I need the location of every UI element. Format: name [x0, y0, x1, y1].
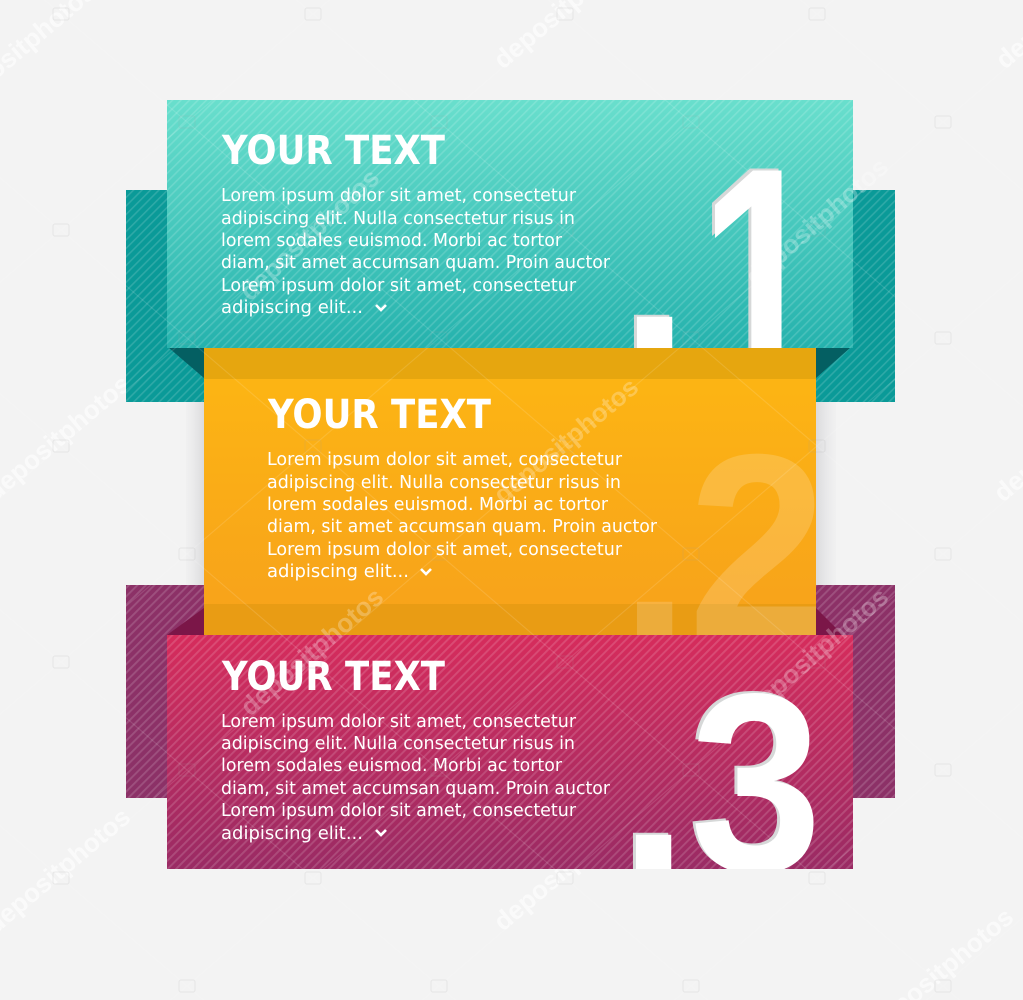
number 1 — [634, 168, 782, 348]
heading: card 2: YOUR TEXT — [267, 392, 492, 438]
body text: card 1: lorem sodales euismod. Morbi ac tortor — [221, 231, 563, 251]
body text: card 1: Lorem ipsum dolor sit amet, consectetur — [221, 186, 577, 206]
body text: card 3: Lorem ipsum dolor sit amet, consectetur — [221, 712, 577, 732]
watermarks: depositphotos — [488, 798, 644, 937]
watermarks over panels — [234, 151, 894, 722]
icon: chevron 3 — [376, 830, 386, 835]
fold: plum right — [816, 608, 843, 635]
watermarks over panels: depositphotos — [488, 371, 644, 510]
panel: plum back band — [126, 585, 895, 798]
panel: teal back band — [126, 190, 895, 402]
watermarks over panels: depositphotos — [234, 581, 389, 722]
number 2: 2 — [688, 401, 827, 692]
body text: card 2 — [267, 450, 658, 582]
body text: card 2: Lorem ipsum dolor sit amet, consectetur — [267, 540, 623, 560]
body text: card 3: diam, sit amet accumsan quam. Proin auctor — [221, 779, 611, 799]
number 1: 1 — [700, 104, 822, 448]
body text: card 3: adipiscing elit... — [221, 824, 363, 844]
number 2 — [637, 454, 816, 635]
body text: card 1 — [221, 186, 611, 318]
watermarks over panels: depositphotos — [739, 581, 894, 722]
body text: card 3: adipiscing elit. Nulla consectetur risus in — [221, 734, 575, 754]
fold: teal right — [816, 348, 850, 378]
fold: teal left — [169, 348, 204, 378]
body text: card 2: diam, sit amet accumsan quam. Proin auctor — [267, 517, 658, 537]
body text: card 2: adipiscing elit. Nulla consectetur risus in — [267, 473, 621, 493]
body text: card 1: Lorem ipsum dolor sit amet, consectetur — [221, 276, 577, 296]
panel shadows — [186, 402, 836, 585]
body text: card 3 — [221, 712, 611, 844]
number 3 — [632, 691, 814, 869]
body text: card 2: adipiscing elit... — [267, 562, 409, 582]
body text: card 1: adipiscing elit... — [221, 298, 363, 318]
watermarks over panels: depositphotos — [234, 162, 385, 306]
number 3: 3 — [690, 641, 822, 926]
icon: chevron 2 — [421, 569, 431, 574]
body text: card 3: Lorem ipsum dolor sit amet, consectetur — [221, 801, 577, 821]
number 3: . — [619, 646, 688, 925]
number 1: . — [617, 126, 686, 405]
body text: card 1: diam, sit amet accumsan quam. Proin auctor — [221, 253, 611, 273]
top strip — [204, 348, 816, 379]
panel: teal card — [167, 100, 853, 348]
number 3: . — [616, 644, 685, 923]
body text: card 1: adipiscing elit. Nulla consectetur risus in — [221, 209, 575, 229]
bottom strip — [204, 604, 816, 635]
panel: orange card — [204, 348, 816, 635]
number 2: . — [620, 413, 689, 692]
icon: chevron 1 — [376, 305, 386, 310]
body text: card 3: lorem sodales euismod. Morbi ac tortor — [221, 756, 563, 776]
watermarks over panels: depositphotos — [739, 151, 894, 292]
body text: card 2: lorem sodales euismod. Morbi ac tortor — [267, 495, 609, 515]
fold: plum left — [167, 608, 204, 635]
heading: card 3: YOUR TEXT — [221, 654, 446, 700]
heading: card 1: YOUR TEXT — [221, 128, 446, 174]
panel: pink card — [167, 635, 853, 869]
body text: card 2: Lorem ipsum dolor sit amet, consectetur — [267, 450, 623, 470]
number 1: 1 — [697, 102, 819, 446]
number 1: . — [620, 128, 689, 407]
number 3: 3 — [687, 639, 819, 924]
